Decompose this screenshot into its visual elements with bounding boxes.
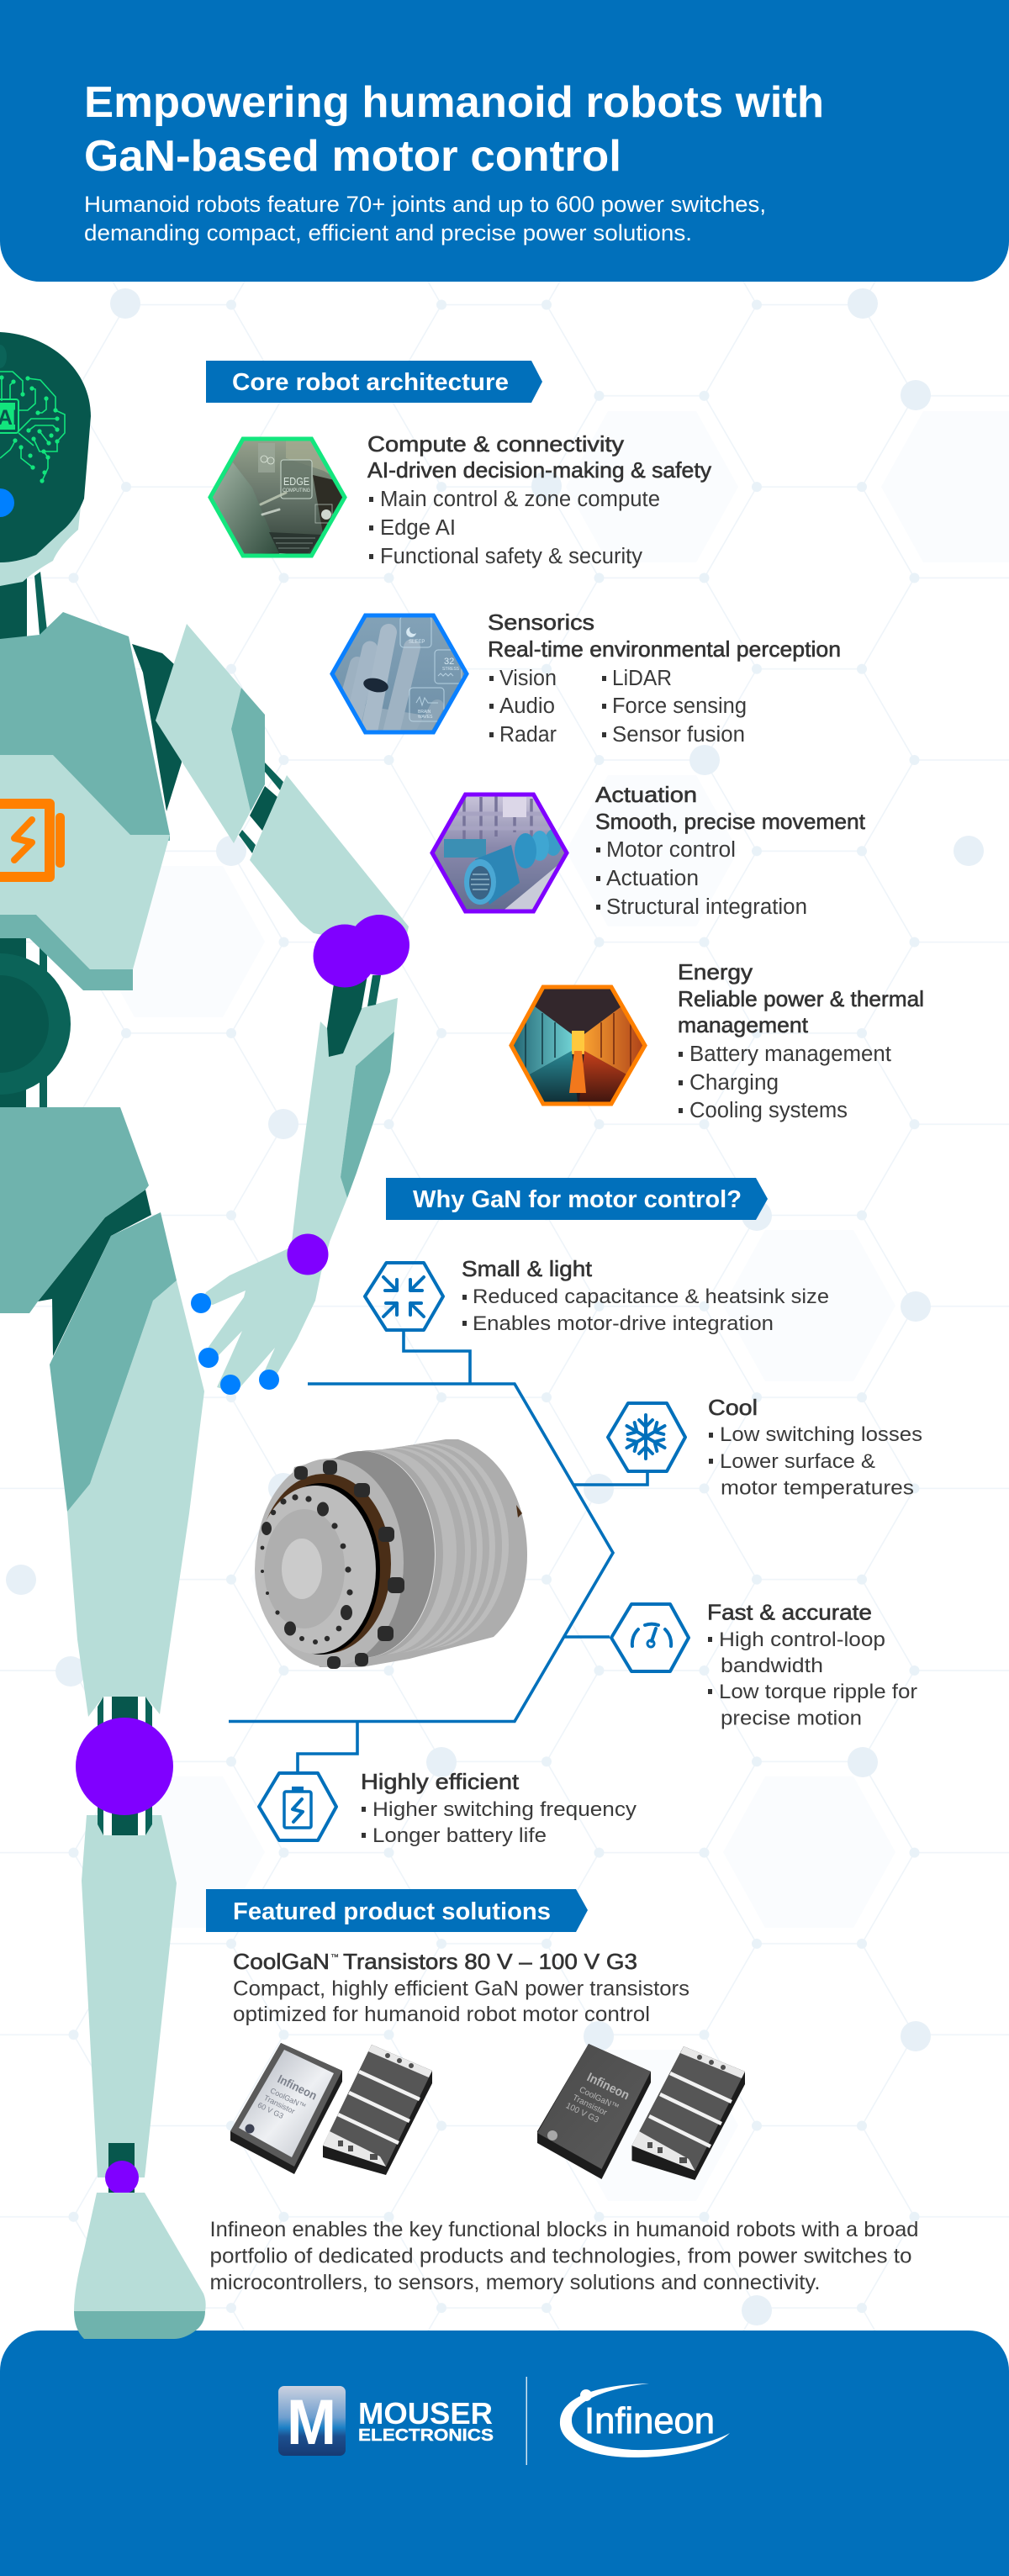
- icon: snowflake: [608, 1403, 685, 1471]
- chip top side: Infineon: [276, 2072, 320, 2103]
- text: sensorics: Sensor fusion: [612, 723, 745, 747]
- text: sensorics: Sensorics: [488, 610, 594, 635]
- logo: Mouser Electronics: ELECTRONICS: [358, 2426, 494, 2445]
- GaN benefit: Fast & accurate: [611, 1599, 917, 1730]
- chip top side: Infineon: [584, 2070, 631, 2103]
- title: Empowering humanoid robots with: [84, 78, 824, 127]
- chip top side: 100 V G3: [564, 2101, 600, 2125]
- text: actuation: Actuation: [595, 782, 697, 807]
- product description: optimized for humanoid robot motor control: [233, 2003, 650, 2026]
- logo: Infineon: [560, 2383, 730, 2457]
- robot figure: [0, 332, 409, 2194]
- text: sensorics: Radar: [499, 723, 557, 747]
- text: sensorics: Audio: [499, 694, 555, 718]
- text: compute: [367, 431, 711, 568]
- section banner: Featured product solutions: [206, 1889, 588, 1932]
- photo hexagon: industrial motors: [429, 790, 572, 916]
- product heading: CoolGaN: [233, 1949, 330, 1974]
- closing paragraph: portfolio of dedicated products and technologies, from power switches to: [210, 2245, 911, 2268]
- elbow joints: [313, 915, 409, 987]
- text: cool: [708, 1395, 922, 1500]
- footer band: [0, 2331, 1009, 2576]
- text: energy: Reliable power & thermal: [678, 986, 924, 1011]
- logo: Mouser Electronics: [278, 2386, 494, 2458]
- text: compute: AI-driven decision-making & safety: [367, 457, 711, 483]
- chip top side: [230, 2043, 342, 2174]
- text: actuation: Motor control: [606, 838, 736, 862]
- text: cool: Lower surface &: [720, 1450, 875, 1473]
- head sensor dot: [0, 488, 14, 517]
- GaN benefit: Small & light: [365, 1256, 829, 1335]
- text: energy: Battery management: [689, 1043, 891, 1066]
- text: actuation: Structural integration: [606, 895, 807, 919]
- product description: Compact, highly efficient GaN power transistors: [233, 1977, 689, 2001]
- chip bottom side: [323, 2045, 432, 2175]
- text: fast & accurate: [707, 1599, 917, 1730]
- chip top side: Transistor: [571, 2093, 609, 2118]
- text: fast & accurate: precise motion: [721, 1707, 862, 1730]
- chip top side: 60 V G3: [256, 2101, 285, 2120]
- robot chest: [0, 612, 170, 990]
- icon: gauge: [611, 1604, 689, 1671]
- text: compute: Main control & zone compute: [380, 488, 660, 511]
- section banner: Why GaN for motor control?: [386, 1178, 768, 1220]
- text: compute: Edge AI: [380, 516, 456, 540]
- subtitle: [84, 192, 766, 245]
- robot spine and waist core: [0, 937, 71, 1107]
- battery icon: [0, 804, 65, 877]
- GaN benefit: Cool: [608, 1395, 922, 1500]
- title: GaN-based motor control: [84, 132, 621, 181]
- text: compute: Compute & connectivity: [367, 431, 624, 457]
- text: cool: Low switching losses: [720, 1423, 922, 1446]
- text: sensorics: LiDAR: [612, 667, 672, 690]
- text: highly efficient: [361, 1769, 637, 1847]
- ankle: [105, 2143, 139, 2194]
- photo hexagon: data centre corridor: [504, 984, 652, 1110]
- text: energy: Cooling systems: [689, 1099, 848, 1122]
- text: compute: Functional safety & security: [380, 545, 642, 568]
- text: fast & accurate: bandwidth: [721, 1655, 823, 1677]
- text: fast & accurate: High control-loop: [719, 1628, 885, 1651]
- logo: Infineon: Infineon: [584, 2400, 715, 2441]
- section banner: Core robot architecture: Core robot architecture: [232, 369, 509, 396]
- chip top side: Transistor: [262, 2093, 296, 2115]
- text: sensorics: Vision: [499, 667, 557, 690]
- text: actuation: Smooth, precise movement: [595, 809, 866, 834]
- text: small & light: [462, 1256, 829, 1335]
- photo hexagon: smart ring: [328, 610, 471, 740]
- icon: battery: [259, 1773, 336, 1840]
- item: Sensorics: [328, 610, 841, 747]
- text: energy: [678, 959, 924, 1122]
- text: highly efficient: Highly efficient: [361, 1769, 520, 1794]
- text: highly efficient: Higher switching frequency: [372, 1798, 637, 1821]
- elbow stripes: [239, 763, 283, 853]
- shin: [82, 1815, 177, 2177]
- product description: [233, 1977, 689, 2026]
- right shoulder joint back: [132, 644, 182, 811]
- text: energy: Energy: [678, 959, 753, 984]
- photo hexagon: edge computing: EDGE: [283, 475, 309, 488]
- product heading: ™: [330, 1953, 339, 1962]
- photo hexagon: smart ring: 32: [444, 657, 454, 667]
- text: cool: Cool: [708, 1395, 758, 1420]
- text: sensorics: [488, 610, 841, 747]
- closing paragraph: microcontrollers, to sensors, memory solutions and connectivity.: [210, 2271, 821, 2294]
- chip top side: [537, 2044, 651, 2179]
- photo hexagon: edge computing: COMPUTING: [283, 488, 310, 494]
- chip bottom side: [632, 2046, 745, 2180]
- product: transistor package 100 V: [537, 2044, 745, 2180]
- section banner: Core robot architecture: [206, 361, 542, 403]
- text: sensorics: Real-time environmental perception: [488, 636, 841, 662]
- text: small & light: Small & light: [462, 1256, 593, 1281]
- text: actuation: Actuation: [606, 867, 699, 890]
- subtitle: demanding compact, efficient and precise power solutions.: [84, 220, 692, 245]
- item: Actuation: [429, 782, 866, 919]
- photo hexagon: edge computing: [206, 433, 349, 560]
- text: small & light: Enables motor-drive integration: [473, 1312, 774, 1335]
- chip top side: CoolGaN™: [578, 2085, 621, 2113]
- photo hexagon: smart ring: SLEEP: [409, 640, 425, 645]
- title: [84, 78, 824, 181]
- knee joint: [76, 1697, 173, 1835]
- robot head: [0, 332, 91, 586]
- logo: Mouser Electronics: MOUSER: [358, 2396, 493, 2431]
- closing paragraph: [210, 2218, 918, 2294]
- robot neck: [0, 572, 47, 639]
- photo hexagon: smart ring: BRAIN: [418, 710, 431, 715]
- text: highly efficient: Longer battery life: [372, 1824, 547, 1847]
- chip top side: CoolGaN™: [269, 2086, 307, 2111]
- item: Compute & connectivity: [206, 431, 711, 568]
- closing paragraph: Infineon enables the key functional blocks in humanoid robots with a broad: [210, 2218, 918, 2241]
- GaN benefit: Highly efficient: [259, 1769, 637, 1847]
- section banner: Why GaN for motor control?: Why GaN for motor control?: [413, 1186, 742, 1213]
- header band: [0, 0, 1009, 282]
- icon: compress arrows: [365, 1263, 443, 1330]
- logo: Mouser Electronics: M: [287, 2387, 336, 2458]
- upper arm: [156, 624, 265, 843]
- connector lines: [229, 1332, 647, 1771]
- photo hexagon: smart ring: STRESS: [442, 667, 460, 672]
- item: Energy: [504, 959, 924, 1122]
- text: energy: Charging: [689, 1071, 779, 1095]
- text: actuation: [595, 782, 866, 919]
- product heading: Transistors 80 V – 100 V G3: [343, 1949, 637, 1974]
- lower arm: [292, 975, 398, 1272]
- robot hand: [191, 1234, 330, 1395]
- product heading: [233, 1949, 637, 1974]
- photo hexagon: smart ring: WAVES: [418, 715, 433, 720]
- section banner: Featured product solutions: Featured product solutions: [233, 1898, 551, 1925]
- text: fast & accurate: Fast & accurate: [707, 1599, 872, 1624]
- thigh: [50, 1212, 204, 1717]
- text: small & light: Reduced capacitance & heatsink size: [473, 1285, 829, 1308]
- text: fast & accurate: Low torque ripple for: [719, 1681, 917, 1703]
- product: transistor package 60 V: [230, 2043, 432, 2175]
- text: sensorics: Force sensing: [612, 694, 747, 718]
- text: cool: motor temperatures: [721, 1476, 914, 1500]
- subtitle: Humanoid robots feature 70+ joints and up to 600 power switches,: [84, 192, 766, 217]
- text: energy: management: [678, 1012, 809, 1037]
- motor illustration: [255, 1439, 527, 1669]
- brain circuit: [0, 372, 65, 483]
- robot foot: [74, 2193, 206, 2339]
- hip: [0, 1107, 151, 1356]
- forearm: [250, 775, 409, 950]
